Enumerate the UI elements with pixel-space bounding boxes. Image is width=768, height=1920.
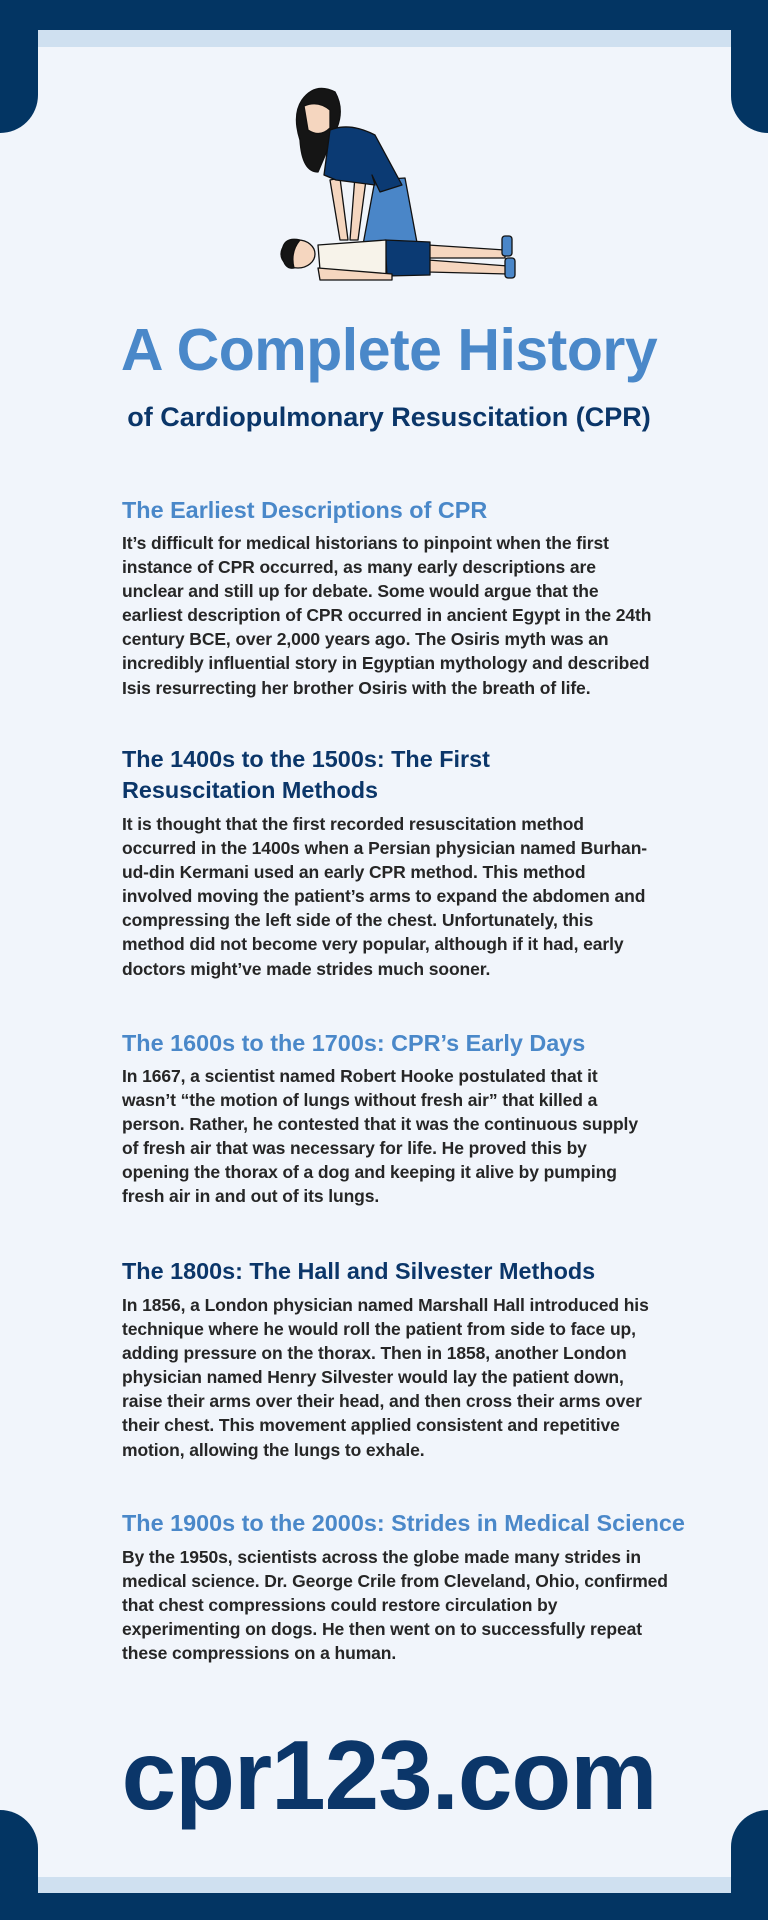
frame: bottom band [0,1893,768,1920]
section 3 text [122,1066,638,1206]
section 1 text: It’s difficult for medical historians to pinpoint when the first [122,533,609,553]
section 2 text: compressing the left side of the chest. Unfortunately, this [122,910,593,930]
section 3 text: person. Rather, he contested that it was the continuous supply [122,1114,638,1134]
section 3 text: fresh air in and out of its lungs. [122,1186,379,1206]
section 4 text: their chest. This movement applied consistent and repetitive [122,1415,620,1435]
woman jeans [362,178,418,250]
shoes [502,236,512,256]
section 3 text: wasn’t “the motion of lungs without fresh air” that killed a [122,1090,597,1110]
section 4 text: In 1856, a London physician named Marshall Hall introduced his [122,1295,649,1315]
section 3 heading: The 1600s to the 1700s: CPR’s Early Days [122,1030,585,1056]
section 2 text: occurred in the 1400s when a Persian physician named Burhan- [122,838,647,858]
section 1 text: unclear and still up for debate. Some would argue that the [122,581,598,601]
section 4 heading: The 1800s: The Hall and Silvester Methods [122,1258,595,1284]
section 2 heading: The 1400s to the 1500s: The First [122,746,490,772]
frame: light strip top [38,30,731,47]
section 3 text: opening the thorax of a dog and keeping it alive by pumping [122,1162,617,1182]
head [281,240,315,268]
frame: top band [0,0,768,30]
section 2 text [122,814,647,979]
section 2 heading: Resuscitation Methods [122,777,378,803]
section 4 text: raise their arms over their head, and then cross their arms over [122,1391,642,1411]
frame: right tab top [731,0,768,133]
title: A Complete History [121,317,657,383]
footer: website: cpr123.com [122,1720,656,1830]
section 2 heading [122,746,490,803]
section 5 text: By the 1950s, scientists across the globe made many strides in [122,1547,641,1567]
section 2 text: ud-din Kermani used an early CPR method. This method [122,862,585,882]
arm [318,268,392,280]
section 4 text: technique where he would roll the patient from side to face up, [122,1319,636,1339]
section 1 text: incredibly influential story in Egyptian mythology and described [122,653,649,673]
section 5 heading: The 1900s to the 2000s: Strides in Medical Science [122,1510,685,1536]
section 1 text: earliest description of CPR occurred in ancient Egypt in the 24th [122,605,651,625]
subtitle: of Cardiopulmonary Resuscitation (CPR) [127,402,651,432]
section 3 text: of fresh air that was necessary for life. He proved this by [122,1138,587,1158]
frame: right tab bottom [731,1810,768,1920]
section 1 text: Isis resurrecting her brother Osiris with the breath of life. [122,678,590,698]
section 5 text: that chest compressions could restore circulation by [122,1595,557,1615]
section 1 heading: The Earliest Descriptions of CPR [122,497,487,523]
section 2 text: It is thought that the first recorded resuscitation method [122,814,584,834]
section 4 text: adding pressure on the thorax. Then in 1858, another London [122,1343,627,1363]
section 2 text: doctors might’ve made strides much sooner. [122,959,490,979]
section 2 text: involved moving the patient’s arms to expand the abdomen and [122,886,645,906]
woman arms [330,178,348,240]
frame: left tab bottom [0,1810,38,1920]
section 5 text: these compressions on a human. [122,1643,396,1663]
woman face [304,104,330,134]
shorts [385,240,430,276]
lying person legs [428,245,505,258]
illustration: CPR scene [280,88,516,281]
section 1 text: instance of CPR occurred, as many early descriptions are [122,557,596,577]
section 5 text: medical science. Dr. George Crile from Cleveland, Ohio, confirmed [122,1571,668,1591]
section 1 text: century BCE, over 2,000 years ago. The Osiris myth was an [122,629,608,649]
section 4 text: motion, allowing the lungs to exhale. [122,1440,425,1460]
lying torso [318,240,386,276]
frame: light strip bottom [38,1877,731,1893]
section 3 text: In 1667, a scientist named Robert Hooke postulated that it [122,1066,598,1086]
section 4 text [122,1295,649,1460]
woman shirt [324,127,402,192]
woman hair [296,88,340,172]
section 1 text [122,533,651,698]
section 5 text [122,1547,668,1663]
frame: left tab top [0,0,38,133]
section 4 text: physician named Henry Silvester would lay the patient down, [122,1367,624,1387]
section 5 text: experimenting on dogs. He then went on to successfully repeat [122,1619,642,1639]
section 2 text: method did not become very popular, although if it had, early [122,934,623,954]
